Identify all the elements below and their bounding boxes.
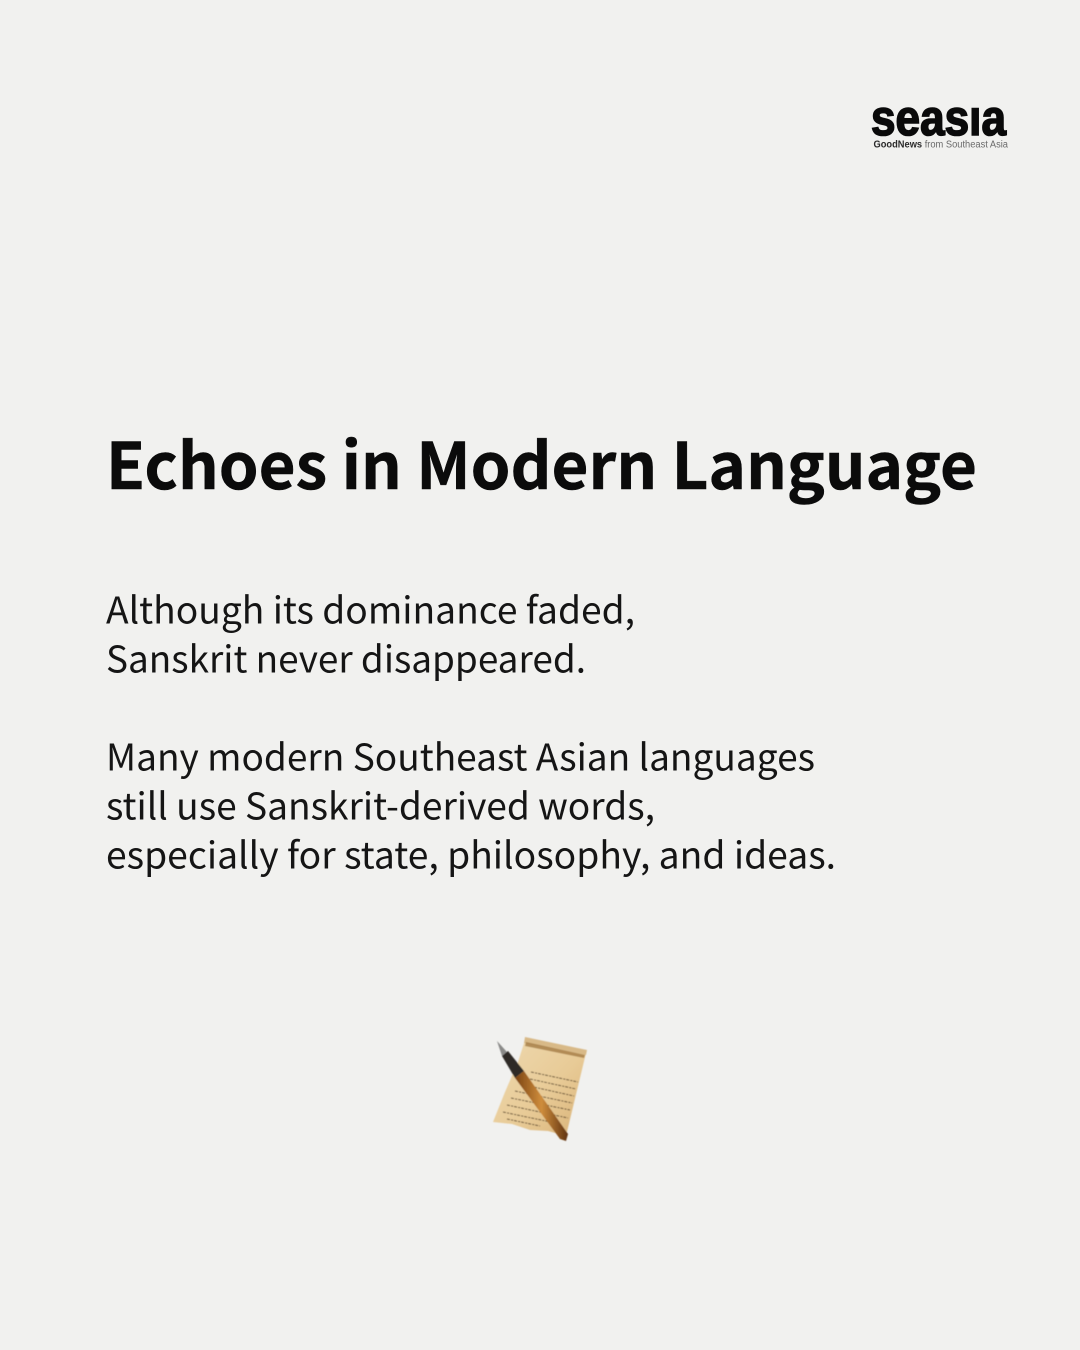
paragraph: dominance faded: Sanskrit never disappeared.	[106, 630, 586, 684]
pen collar	[502, 1051, 524, 1078]
pen barrel	[515, 1071, 568, 1141]
paragraph: dominance faded: Although its dominance faded,	[106, 580, 635, 634]
logo: seasia	[872, 107, 1008, 148]
paragraph: dominance faded	[106, 580, 635, 684]
logo wordmark: seasia	[871, 90, 1007, 146]
parchment sheet	[493, 1040, 586, 1136]
paragraph: modern languages: especially for state, philosophy, and ideas.	[106, 826, 836, 880]
fountain pen	[497, 1041, 568, 1141]
handwriting lines	[503, 1072, 578, 1126]
rolled top edge	[524, 1037, 587, 1055]
paragraph: modern languages	[106, 728, 836, 880]
logo tagline: GoodNews from Southeast Asia	[874, 140, 1008, 150]
paragraph: modern languages: still use Sanskrit-derived words,	[106, 776, 655, 830]
pen nib	[497, 1041, 507, 1056]
icon: scroll and fountain pen	[493, 1037, 587, 1141]
title: Echoes in Modern Language	[106, 416, 977, 508]
paragraph: modern languages: Many modern Southeast Asian languages	[106, 728, 815, 782]
